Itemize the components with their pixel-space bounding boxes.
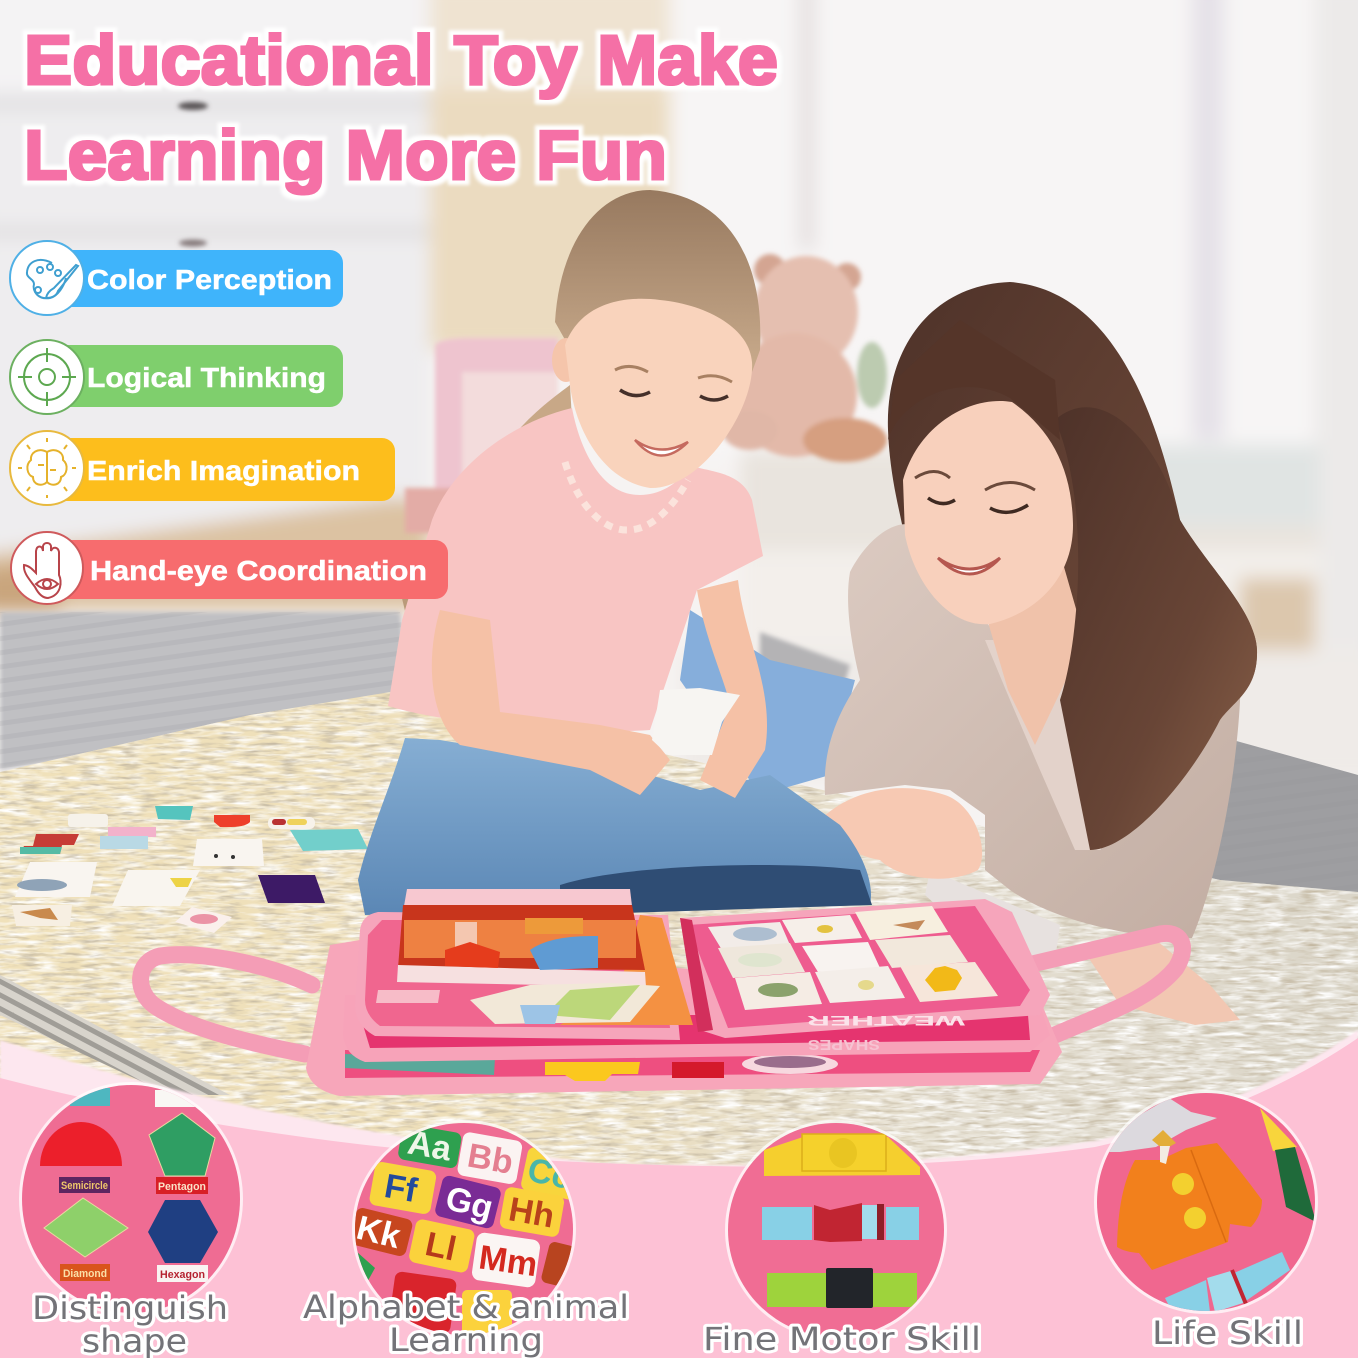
circle: distinguish shape: Semicircle <box>61 1180 108 1192</box>
circle: alphabet: Ll <box>422 1225 459 1268</box>
circle: alphabet: Mm <box>476 1238 540 1284</box>
right page <box>680 899 1050 1038</box>
circle: alphabet: Kk <box>353 1209 404 1256</box>
woman <box>680 282 1257 1025</box>
circle: life skill <box>1094 1090 1319 1318</box>
cream woven rug <box>0 690 1358 1200</box>
caption: distinguish shape: Distinguish <box>32 1289 228 1327</box>
icon: hand with eye <box>24 543 61 598</box>
pink chair <box>405 338 558 533</box>
left page <box>355 912 680 1040</box>
skill badge: color perception: Color Perception <box>87 264 332 295</box>
caption: alphabet and animal: Alphabet & animal <box>303 1288 629 1326</box>
bottom tray <box>306 940 1062 1096</box>
circle: fine motor <box>725 1120 947 1342</box>
title line 2: Learning More Fun <box>24 116 667 194</box>
circle: alphabet <box>348 1118 589 1340</box>
skill badge: hand-eye coordination <box>11 532 448 604</box>
circle: distinguish shape: Diamond <box>63 1268 107 1280</box>
circle: alphabet: Ff <box>382 1167 420 1210</box>
icon: palette <box>27 260 78 298</box>
skill badge: logical thinking <box>10 340 343 414</box>
illustrated bed <box>470 983 660 1024</box>
busy book <box>141 889 1183 1096</box>
caption: fine motor skill: Fine Motor Skill <box>703 1320 981 1358</box>
skill badge: enrich imagination <box>10 431 395 505</box>
teddy bear <box>722 254 887 462</box>
skill badge: enrich imagination: Enrich Imagination <box>87 455 360 486</box>
orange floor <box>560 915 693 1025</box>
red flap scene <box>397 889 646 987</box>
circle: alphabet: Bb <box>465 1137 516 1182</box>
caption: learning: Learning <box>389 1321 543 1358</box>
book straps <box>141 933 1183 1054</box>
skill badge: logical thinking: Logical Thinking <box>87 362 326 393</box>
circle: distinguish shape <box>19 1082 243 1316</box>
drawer handles <box>178 102 208 246</box>
girl <box>358 190 872 915</box>
circle: alphabet: Hh <box>506 1190 557 1236</box>
caption: life skill: Life Skill <box>1152 1314 1303 1352</box>
title line 1: Educational Toy Make <box>24 21 778 99</box>
circle: distinguish shape: Hexagon <box>160 1269 205 1281</box>
skill badge: hand-eye coordination: Hand-eye Coordination <box>90 555 427 586</box>
floor and grey rug <box>0 612 1358 900</box>
weather cards <box>708 906 998 1010</box>
cards scattered on rug <box>12 806 368 933</box>
icon: brain <box>18 438 76 498</box>
circle: alphabet: Aa <box>405 1124 455 1169</box>
shapes caption: SHAPES <box>808 1036 880 1053</box>
circle: alphabet: Gg <box>442 1179 497 1228</box>
icon: target <box>18 348 76 406</box>
bottom tray items <box>345 1054 838 1081</box>
circle: distinguish shape: Pentagon <box>158 1181 206 1193</box>
skill badge: color perception <box>10 241 343 315</box>
weather caption: WEATHER <box>807 1013 965 1029</box>
circle: alphabet: Cc <box>524 1151 575 1197</box>
pink base with white arc <box>0 1030 1358 1358</box>
second page <box>343 990 1050 1062</box>
